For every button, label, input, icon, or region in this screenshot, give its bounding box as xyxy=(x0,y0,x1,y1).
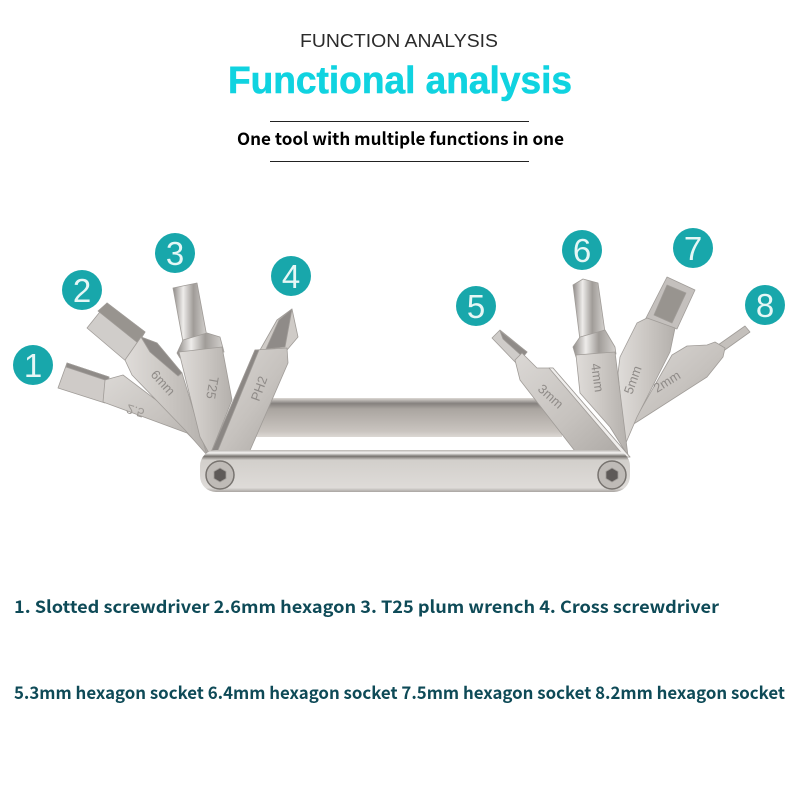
bit 6: 4mm hexagon socket: 4mm xyxy=(588,362,607,393)
bit 1: slotted screwdriver: 2.5 xyxy=(124,401,146,421)
bit 7: 5mm hexagon socket xyxy=(618,277,695,445)
multi-tool illustration xyxy=(58,277,750,492)
number badge 5: 5 xyxy=(467,288,485,325)
number badge 8: 8 xyxy=(756,287,774,324)
number badge 2 xyxy=(62,270,102,310)
bit 7: 5mm hexagon socket: 5mm xyxy=(621,364,645,396)
number badge 2: 2 xyxy=(73,272,91,309)
bit 4: cross screwdriver: PH2 xyxy=(248,374,270,403)
bit 3: T25 plum wrench xyxy=(173,283,232,455)
bit 1: slotted screwdriver xyxy=(58,363,210,456)
bit 8: 2mm hexagon socket: 2mm xyxy=(651,368,683,396)
bit 4: cross screwdriver xyxy=(210,309,298,455)
number badge 1 xyxy=(13,345,53,385)
left pivot screw xyxy=(206,461,234,489)
number badge 4: 4 xyxy=(282,258,300,295)
small heading: FUNCTION ANALYSIS xyxy=(300,31,498,51)
front bar xyxy=(200,450,630,492)
main title: Functional analysis xyxy=(228,60,572,102)
right pivot screw xyxy=(598,461,626,489)
bit 8: 2mm hexagon socket xyxy=(632,326,750,425)
number badge 3 xyxy=(155,233,195,273)
bit 3: T25 plum wrench: T25 xyxy=(203,375,222,400)
number badge 8 xyxy=(745,285,785,325)
number badge 7: 7 xyxy=(684,230,702,267)
number badge 6 xyxy=(562,230,602,270)
number badge 4 xyxy=(271,256,311,296)
number badge 5 xyxy=(456,286,496,326)
bit 6: 4mm hexagon socket xyxy=(573,279,628,456)
number badge 7 xyxy=(673,228,713,268)
number badge 3: 3 xyxy=(166,235,184,272)
bit 2: hexagon 6mm xyxy=(87,303,207,455)
function list line 2: 5.3mm hexagon socket 6.4mm hexagon socket 7.5mm hexagon socket 8.2mm hexagon socket xyxy=(14,679,785,704)
bit 5: 3mm hexagon socket: 3mm xyxy=(535,381,566,412)
bit 5: 3mm hexagon socket xyxy=(492,330,630,457)
number badge 6: 6 xyxy=(573,232,591,269)
rear bar xyxy=(250,398,562,437)
subtitle with rules: One tool with multiple functions in one xyxy=(237,125,564,150)
bit 2: hexagon 6mm: 6mm xyxy=(148,367,178,398)
function list line 1: 1. Slotted screwdriver 2.6mm hexagon 3. T25 plum wrench 4. Cross screwdriver xyxy=(14,593,720,618)
number badge 1: 1 xyxy=(24,347,42,384)
